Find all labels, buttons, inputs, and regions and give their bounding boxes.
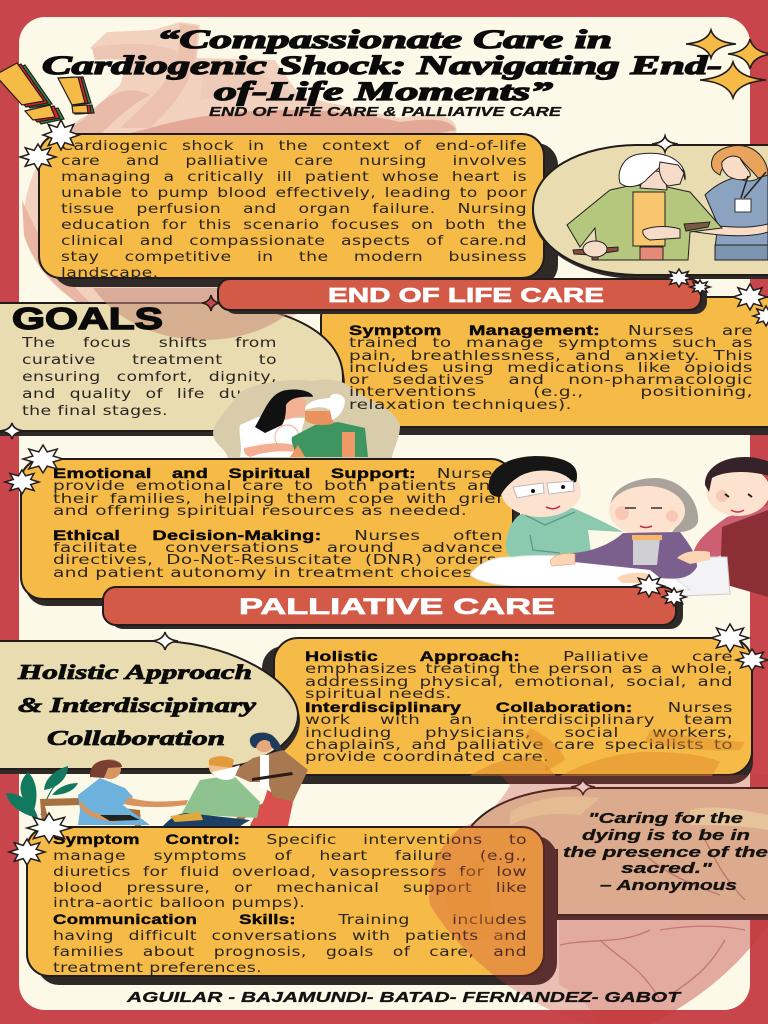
intro paragraph: tissue perfusion and organ failure. Nursing — [61, 202, 527, 217]
symptom control text: blood pressure, or mechanical support like — [53, 881, 527, 896]
emotional and ethical text: directives, Do-Not-Resuscitate (DNR) orders, — [53, 553, 503, 568]
goals text: ensuring comfort, dignity, — [22, 370, 277, 385]
panel: quote box — [460, 788, 768, 920]
quote text: – Anonymous — [600, 878, 737, 894]
panel: illustration oval with patient and nurse — [532, 145, 768, 279]
panel: goals shape — [0, 303, 345, 436]
intro paragraph: Cardiogenic shock in the context of end-of-life — [61, 138, 527, 154]
holistic and interdisciplinary text: including physicians, social workers, — [305, 726, 733, 741]
goals text: curative treatment to — [22, 353, 277, 368]
holistic and interdisciplinary text: chaplains, and palliative care specialists to — [305, 738, 733, 753]
gold sparkles — [686, 30, 768, 98]
holistic title text: Collaboration — [47, 726, 225, 750]
intro paragraph: care and palliative care nursing involves — [61, 154, 527, 169]
banner: palliative care: PALLIATIVE CARE — [239, 594, 555, 619]
emotional and ethical text: provide emotional care to both patients and — [53, 479, 503, 494]
symptom control text: treatment preferences. — [53, 961, 262, 976]
intro paragraph: landscape. — [61, 266, 159, 281]
title: of-Life Moments” — [214, 77, 553, 106]
footer: authors: AGUILAR - BAJAMUNDI- BATAD- FERNANDEZ- GABOT — [126, 989, 683, 1006]
holistic and interdisciplinary text: spiritual needs. — [305, 687, 452, 702]
symptom control text: intra-aortic balloon pumps). — [53, 896, 305, 911]
illustration: interdisciplinary team — [6, 732, 308, 826]
sparkle — [202, 295, 220, 311]
white burst stars — [5, 120, 768, 865]
panel: symptom management box — [321, 297, 768, 435]
holistic and interdisciplinary text: emphasizes treating the person as a whole, — [305, 662, 733, 677]
intro paragraph: clinical and compassionate aspects of care.nd — [61, 234, 527, 249]
illustration: family around patient in bed — [470, 456, 768, 597]
title: Cardiogenic Shock: Navigating End- — [42, 51, 722, 80]
symptom control text: having difficult conversations with patients and — [53, 929, 527, 944]
subtitle: END OF LIFE CARE & PALLIATIVE CARE — [209, 104, 561, 119]
intro paragraph: stay competitive in the modern business — [61, 250, 527, 265]
symptom management text: interventions (e.g., positioning, — [349, 385, 753, 400]
panel: holistic title shape — [0, 641, 300, 774]
title: “Compassionate Care in — [157, 25, 612, 54]
holistic title text — [17, 660, 257, 750]
symptom control text: families about prognosis, goals of care, and — [53, 945, 527, 960]
intro paragraph: unable to pump blood effectively, leading to poor — [61, 186, 527, 201]
symptom management text: pain, breathlessness, and anxiety. This — [349, 349, 753, 364]
illustration: embrace of caregiver and elder — [213, 380, 400, 458]
emotional and ethical text: and patient autonomy in treatment choices. — [53, 566, 479, 581]
title — [42, 25, 722, 106]
holistic and interdisciplinary text: addressing physical, emotional, social, and — [305, 675, 733, 690]
symptom control text: diuretics for fluid overload, vasopressors for low — [53, 865, 527, 880]
goals text: and quality of life during — [22, 387, 277, 402]
sparkle — [152, 632, 178, 650]
holistic and interdisciplinary text: Interdisciplinary Collaboration: Nurses — [305, 699, 733, 716]
emotional and ethical text: their families, helping them cope with grief — [53, 492, 503, 507]
panel: emotional and ethical box — [21, 459, 520, 606]
symptom management text — [349, 324, 757, 414]
intro paragraph — [61, 138, 531, 284]
goals text — [22, 336, 284, 424]
goals text: The focus shifts from — [22, 336, 277, 351]
symptom management text: or sedatives and non-pharmacologic — [349, 373, 753, 388]
icon: patient with cane — [567, 153, 722, 260]
panel: intro text box — [39, 134, 558, 287]
panel: holistic and interdisciplinary box — [262, 638, 753, 784]
intro paragraph: education for this scenario focuses on both the — [61, 218, 527, 233]
sparkle — [652, 136, 678, 152]
sparkle — [0, 423, 24, 439]
heart lower lobe showing through — [93, 288, 305, 340]
banner: end of life care — [218, 279, 707, 314]
overlay: translucent anatomical heart, bottom right — [429, 728, 768, 1024]
symptom management text: relaxation techniques). — [349, 398, 572, 413]
emotional and ethical text: Ethical Decision-Making: Nurses often — [53, 527, 503, 544]
quote text: "Caring for the — [588, 811, 743, 827]
sparkle — [571, 779, 595, 795]
symptom control text — [53, 832, 533, 978]
icon: nurse — [683, 146, 768, 260]
quote text: dying is to be in — [582, 828, 750, 844]
goals heading: GOALS — [12, 301, 163, 336]
banner: end of life care: END OF LIFE CARE — [328, 285, 604, 307]
holistic and interdisciplinary text — [305, 650, 737, 764]
quote text — [563, 811, 768, 894]
holistic and interdisciplinary text: work with an interdisciplinary team — [305, 713, 733, 728]
quote text: sacred." — [621, 861, 714, 877]
goals text: the final stages. — [22, 404, 168, 419]
symptom control text: manage symptoms of heart failure (e.g., — [53, 849, 527, 864]
panel: symptom control box — [27, 827, 557, 985]
emotional and ethical text: facilitate conversations around advance — [53, 541, 503, 556]
holistic title text: Holistic Approach — [17, 660, 252, 684]
exclamation marks — [0, 63, 94, 124]
background anatomical heart, top — [22, 22, 457, 340]
intro paragraph: managing a critically ill patient whose heart is — [61, 170, 527, 185]
holistic title text: & Interdiscipinary — [18, 693, 257, 717]
symptom management text: trained to manage symptoms such as — [349, 336, 753, 351]
quote text: the presence of the — [563, 845, 768, 861]
banner: palliative care — [103, 587, 683, 629]
symptom management text: includes using medications like opioids — [349, 361, 753, 376]
emotional and ethical text: and offering spiritual resources as needed. — [53, 504, 467, 519]
emotional and ethical text — [53, 467, 508, 581]
symptom control text: Communication Skills: Training includes — [53, 911, 527, 928]
